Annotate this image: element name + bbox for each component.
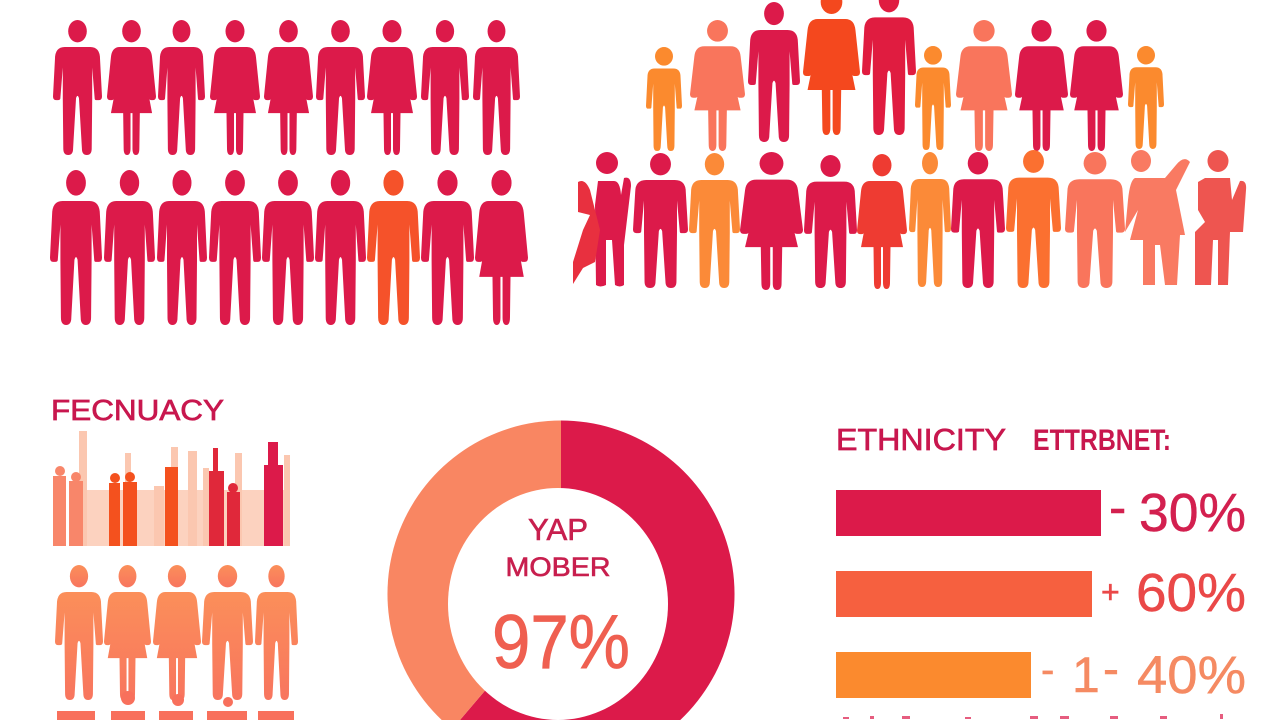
panel: left crowd of figures: [50, 20, 528, 325]
bar: 30%: 30%: [1139, 483, 1246, 543]
bar: 60%: +: [1101, 574, 1120, 610]
row of crimson figures, upper: [53, 20, 520, 155]
donut segment: crimson: [460, 420, 735, 720]
bar: 40%: -: [1041, 648, 1054, 692]
row of salmon figures: [55, 565, 298, 700]
bar: 40%: -: [1103, 643, 1119, 696]
bar: 30%: [836, 479, 1246, 543]
bar: 40%: [836, 643, 1246, 705]
distorted figure, right end: [1195, 150, 1246, 285]
back row of figures: [646, 0, 1164, 151]
donut label: [492, 512, 630, 685]
donut label: YAP: [528, 512, 588, 547]
front row of figures: [573, 150, 1246, 290]
skyline chart of silhouettes: [53, 431, 290, 546]
panel: right crowd of figures: [573, 0, 1246, 290]
distorted figure, salmon: [1125, 150, 1190, 285]
partial lower row of figures: [57, 691, 294, 720]
distorted figure, left end: [573, 152, 631, 286]
panel: frequency: [51, 395, 298, 720]
donut chart: [387, 420, 735, 720]
bar: 60%: 60%: [1136, 563, 1246, 623]
row of crimson figures, lower: [50, 170, 528, 325]
donut label: MOBER: [506, 552, 610, 582]
footnote fragments: [843, 714, 1223, 719]
bar: 30%: -: [1109, 479, 1126, 537]
heading: frequency: FECNUACY: [51, 395, 224, 427]
donut hole: [448, 488, 668, 720]
donut label: 97%: [492, 600, 630, 685]
bar: 40%: 40%: [1137, 646, 1246, 705]
heading: ethnicity: ETHNICITY: [836, 422, 1006, 457]
donut segment: salmon: [387, 420, 561, 720]
bar: 40%: 1: [1072, 647, 1100, 703]
subheading: ETTRBNET:: [1033, 424, 1171, 457]
panel: ethnicity bar chart: [836, 422, 1246, 719]
bar: 60%: [836, 563, 1246, 623]
